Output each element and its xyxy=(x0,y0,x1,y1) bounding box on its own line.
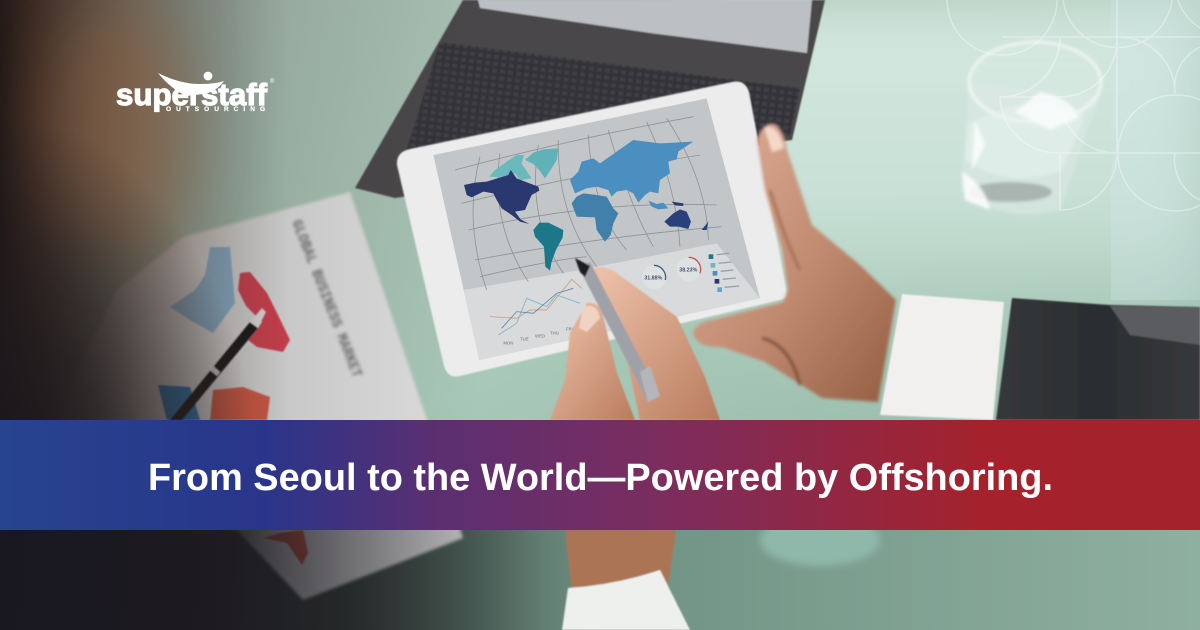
ring gauges xyxy=(642,265,666,289)
tablet xyxy=(397,81,788,377)
tinted panel with decorative arc pattern xyxy=(947,0,1200,300)
paper map: orange region xyxy=(210,387,270,420)
legend swatches xyxy=(709,254,713,259)
forearm and cuff below the banner xyxy=(562,530,690,630)
logo registered mark: ® xyxy=(270,78,275,85)
logo wordmark: superstaff xyxy=(116,77,268,112)
chart axis labels: FRI xyxy=(566,327,573,332)
logo: superstaff outsourcing xyxy=(116,72,275,113)
white shirt cuff, right arm xyxy=(880,294,1004,420)
paper title: GLOBAL BUSINESS MARKET xyxy=(287,218,365,380)
line chart xyxy=(490,279,582,335)
index finger xyxy=(592,267,720,420)
dark blurred foreground at left xyxy=(0,0,540,630)
dark suit sleeve xyxy=(996,298,1200,420)
headline text: From Seoul to the World—Powered by Offshoring. xyxy=(148,457,1053,499)
chart axis labels xyxy=(503,327,573,345)
tablet screen with world map: 38.23% xyxy=(679,267,698,273)
chart axis labels: WED xyxy=(535,333,545,338)
logo tagline: OUTSOURCING xyxy=(166,106,265,113)
pen on the paper xyxy=(170,308,266,420)
water glass xyxy=(961,42,1101,214)
chart axis labels: MON xyxy=(503,340,513,345)
paper map: red region xyxy=(238,272,290,352)
map grid xyxy=(455,117,722,290)
paper map: blue region xyxy=(158,385,200,420)
tablet screen with world map: 31.88% xyxy=(644,275,663,281)
tablet body xyxy=(397,81,788,377)
paper document with red and blue map xyxy=(60,192,463,600)
gradient headline banner xyxy=(0,420,1200,530)
laptop xyxy=(355,0,825,198)
tablet screen with world map xyxy=(433,98,760,360)
pen xyxy=(578,262,660,402)
logo swoosh xyxy=(158,73,224,96)
thumb xyxy=(550,303,635,420)
paper map: lower red region xyxy=(263,530,308,565)
paper map: north america xyxy=(170,247,235,333)
chart axis labels: THU xyxy=(550,330,559,335)
chart axis labels: TUE xyxy=(520,337,529,342)
right hand holding the tablet xyxy=(693,124,896,402)
hand with pen xyxy=(550,258,720,420)
continents xyxy=(525,148,558,178)
